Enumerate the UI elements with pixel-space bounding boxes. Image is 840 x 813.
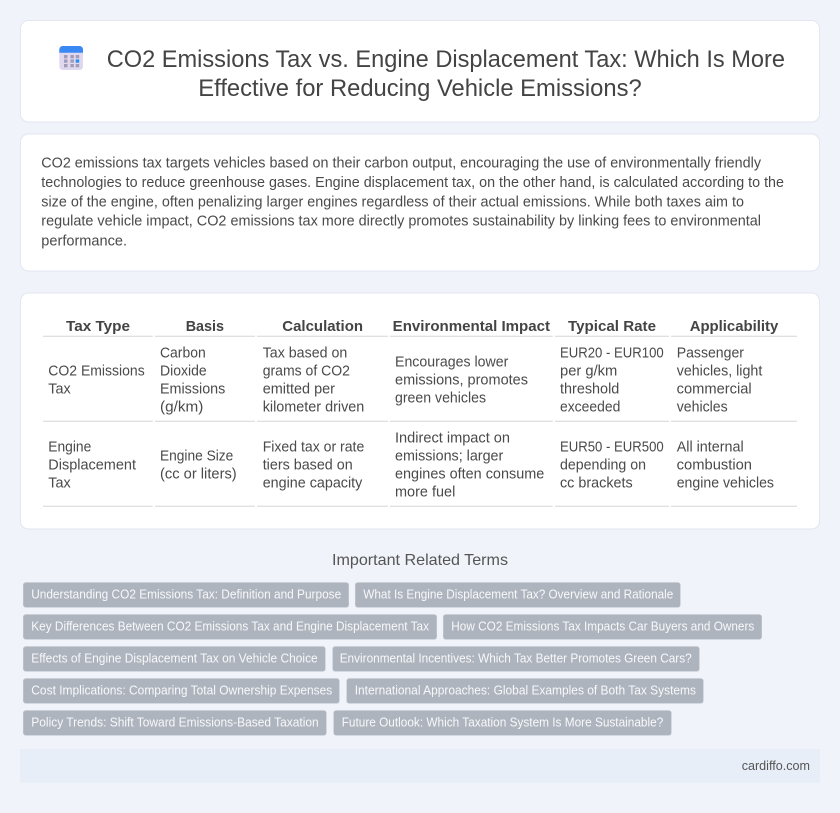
table row: Engine Displacement Tax: (cc or liters) bbox=[160, 467, 237, 483]
table row: Engine Displacement Tax: tiers based on bbox=[263, 458, 353, 474]
tag: cost implications bbox=[23, 678, 339, 703]
table row: CO2 Emissions Tax: commercial bbox=[677, 382, 752, 398]
table row: CO2 Emissions Tax: Tax based on bbox=[263, 346, 347, 362]
tag: environmental incentives bbox=[333, 646, 699, 671]
footer bbox=[20, 749, 820, 783]
table row: CO2 Emissions Tax: green vehicles bbox=[395, 391, 486, 407]
table header row: Calculation bbox=[282, 318, 363, 335]
related terms tags bbox=[23, 582, 762, 735]
heading: important related terms: Important Related Terms bbox=[332, 552, 508, 569]
tag: key differences bbox=[23, 614, 437, 639]
table row: Engine Displacement Tax: engine vehicles bbox=[677, 476, 774, 492]
tag: what is engine displacement tax: What Is Engine Displacement Tax? Overview and Rationale bbox=[363, 588, 673, 602]
tag: policy trends bbox=[23, 710, 326, 735]
table row: Engine Displacement Tax: Engine bbox=[48, 440, 91, 456]
tag: cost implications: Cost Implications: Comparing Total Ownership Expenses bbox=[31, 684, 332, 698]
tag: environmental incentives: Environmental Incentives: Which Tax Better Promotes Green Cars? bbox=[340, 652, 692, 666]
tag: key differences: Key Differences Between CO2 Emissions Tax and Engine Displacement Tax bbox=[31, 620, 430, 634]
table row: CO2 Emissions Tax: threshold bbox=[560, 382, 619, 398]
table row: CO2 Emissions Tax: kilometer driven bbox=[263, 400, 364, 416]
table header row: Typical Rate bbox=[568, 318, 656, 335]
table row: CO2 Emissions Tax: per g/km bbox=[560, 364, 617, 380]
table row: Engine Displacement Tax: engines often consume bbox=[395, 467, 544, 483]
table row: CO2 Emissions Tax: vehicles bbox=[677, 400, 728, 416]
title: CO2 Emissions Tax vs. Engine Displacement Tax: Which Is More bbox=[107, 46, 785, 73]
text block: introduction paragraph bbox=[41, 156, 784, 249]
table row: Engine Displacement Tax: emissions; larger bbox=[395, 449, 503, 465]
table row: Engine Displacement Tax: Displacement bbox=[48, 458, 136, 474]
table row: CO2 Emissions Tax bbox=[43, 346, 797, 422]
tag: international approaches bbox=[347, 678, 703, 703]
table header row: Basis bbox=[186, 318, 224, 335]
table header row: Applicability bbox=[690, 318, 779, 335]
table row: CO2 Emissions Tax: Tax bbox=[48, 382, 71, 398]
table row: CO2 Emissions Tax: EUR20 - EUR100 bbox=[560, 346, 664, 362]
table row: CO2 Emissions Tax: emissions, promotes bbox=[395, 373, 528, 389]
title: Effective for Reducing Vehicle Emissions? bbox=[198, 75, 642, 102]
icon: calendar bbox=[59, 46, 83, 70]
table header row bbox=[43, 318, 797, 337]
table row: CO2 Emissions Tax: exceeded bbox=[560, 400, 620, 416]
text block: introduction paragraph: regulate vehicle impact, CO2 emissions tax more directly promotes sustainability by linking fees to environmental bbox=[41, 214, 761, 230]
table row: CO2 Emissions Tax: Passenger bbox=[677, 346, 744, 362]
footer: cardiffo.com bbox=[742, 758, 810, 773]
table row: CO2 Emissions Tax: Carbon bbox=[160, 346, 206, 362]
table row: Engine Displacement Tax: more fuel bbox=[395, 485, 455, 501]
text block: introduction paragraph: CO2 emissions tax targets vehicles based on their carbon output, encouraging the use of environmentally friendly bbox=[41, 156, 762, 172]
table row: Engine Displacement Tax: depending on bbox=[560, 458, 646, 474]
tag: future outlook: Future Outlook: Which Taxation System Is More Sustainable? bbox=[342, 716, 663, 730]
tag: future outlook bbox=[334, 710, 671, 735]
panel: title header bbox=[20, 20, 820, 122]
table row: Engine Displacement Tax: All internal bbox=[677, 440, 744, 456]
text block: introduction paragraph: size of the engine, often penalizing larger engines regardless of their actual emissions. While both taxes aim to bbox=[41, 194, 744, 210]
table row: CO2 Emissions Tax: Encourages lower bbox=[395, 355, 508, 371]
text block: introduction paragraph: technologies to reduce greenhouse gases. Engine displacement tax, on the other hand, is calculated according to the bbox=[41, 175, 784, 191]
title bbox=[107, 46, 785, 102]
tag: policy trends: Policy Trends: Shift Toward Emissions-Based Taxation bbox=[31, 716, 319, 730]
table row: CO2 Emissions Tax: vehicles, light bbox=[677, 364, 762, 380]
tag: understanding CO2 tax: Understanding CO2 Emissions Tax: Definition and Purpose bbox=[31, 588, 341, 602]
table header row: Environmental Impact bbox=[393, 318, 550, 335]
tag: vehicle choice bbox=[23, 646, 325, 671]
tag: understanding CO2 tax bbox=[23, 582, 349, 607]
tag: buyers and owners: How CO2 Emissions Tax Impacts Car Buyers and Owners bbox=[451, 620, 754, 634]
table row: CO2 Emissions Tax: Dioxide bbox=[160, 364, 207, 380]
table row: Engine Displacement Tax: Tax bbox=[48, 476, 71, 492]
tag: what is engine displacement tax bbox=[355, 582, 680, 607]
table row: Engine Displacement Tax: engine capacity bbox=[263, 476, 363, 492]
table row: Engine Displacement Tax bbox=[43, 431, 797, 507]
table row: Engine Displacement Tax: cc brackets bbox=[560, 476, 633, 492]
table row: CO2 Emissions Tax: Emissions bbox=[160, 382, 225, 398]
tag: vehicle choice: Effects of Engine Displacement Tax on Vehicle Choice bbox=[31, 652, 318, 666]
table row: CO2 Emissions Tax: emitted per bbox=[263, 382, 335, 398]
panel: introduction bbox=[20, 134, 820, 271]
table row: CO2 Emissions Tax: (g/km) bbox=[160, 400, 203, 416]
table row: Engine Displacement Tax: combustion bbox=[677, 458, 752, 474]
table row: CO2 Emissions Tax: CO2 Emissions bbox=[48, 364, 145, 380]
tag: international approaches: International Approaches: Global Examples of Both Tax Systems bbox=[355, 684, 696, 698]
table header row: Tax Type bbox=[66, 318, 130, 335]
text block: introduction paragraph: performance. bbox=[41, 233, 127, 249]
tag: buyers and owners bbox=[443, 614, 762, 639]
table row: CO2 Emissions Tax: grams of CO2 bbox=[263, 364, 350, 380]
panel: comparison table bbox=[20, 293, 820, 529]
table row: Engine Displacement Tax: Indirect impact on bbox=[395, 431, 510, 447]
table row: Engine Displacement Tax: Fixed tax or rate bbox=[263, 440, 364, 456]
table row: Engine Displacement Tax: Engine Size bbox=[160, 449, 233, 465]
table row: Engine Displacement Tax: EUR50 - EUR500 bbox=[560, 440, 664, 456]
